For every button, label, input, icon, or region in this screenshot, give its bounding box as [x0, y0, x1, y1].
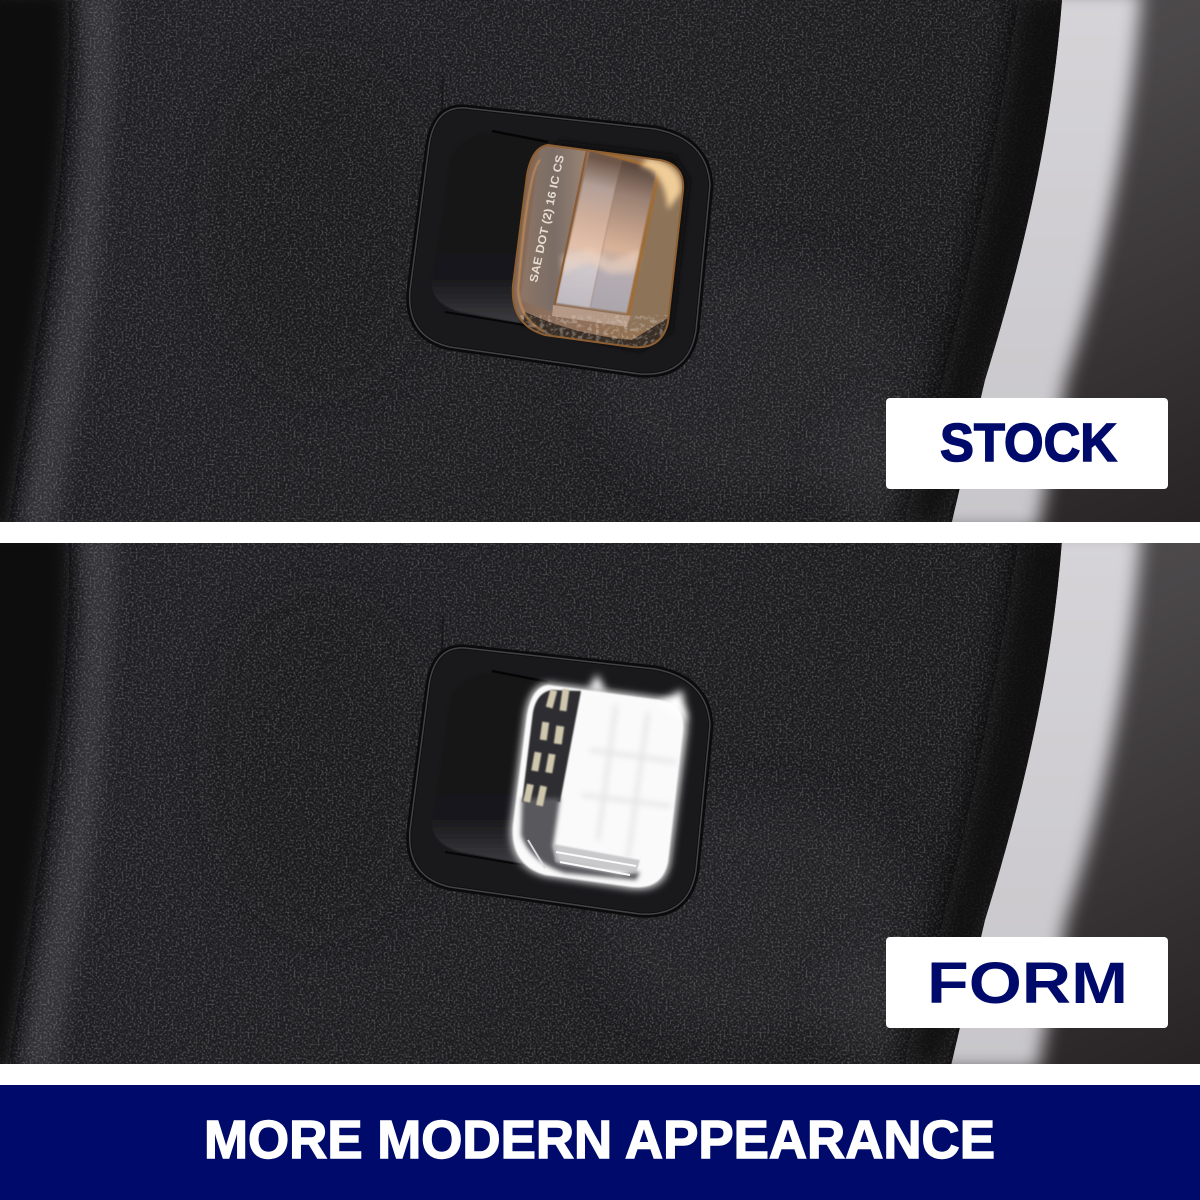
lens embossed text: SAE DOT (2) 16 IC CS	[528, 154, 567, 284]
LED chips	[523, 689, 570, 806]
label: STOCK	[886, 398, 1168, 489]
stock lens housing	[513, 145, 685, 353]
light flares	[588, 674, 688, 722]
panel: stock photo	[0, 0, 1200, 530]
banner heading: MORE MODERN APPEARANCE	[204, 1110, 995, 1170]
label: FORM	[886, 937, 1168, 1028]
label: STOCK: STOCK	[940, 413, 1117, 473]
label: FORM: FORM	[927, 951, 1128, 1016]
panel: form photo	[0, 530, 1200, 1070]
banner: more modern appearance	[0, 1085, 1200, 1200]
lit LED lens	[511, 674, 688, 889]
